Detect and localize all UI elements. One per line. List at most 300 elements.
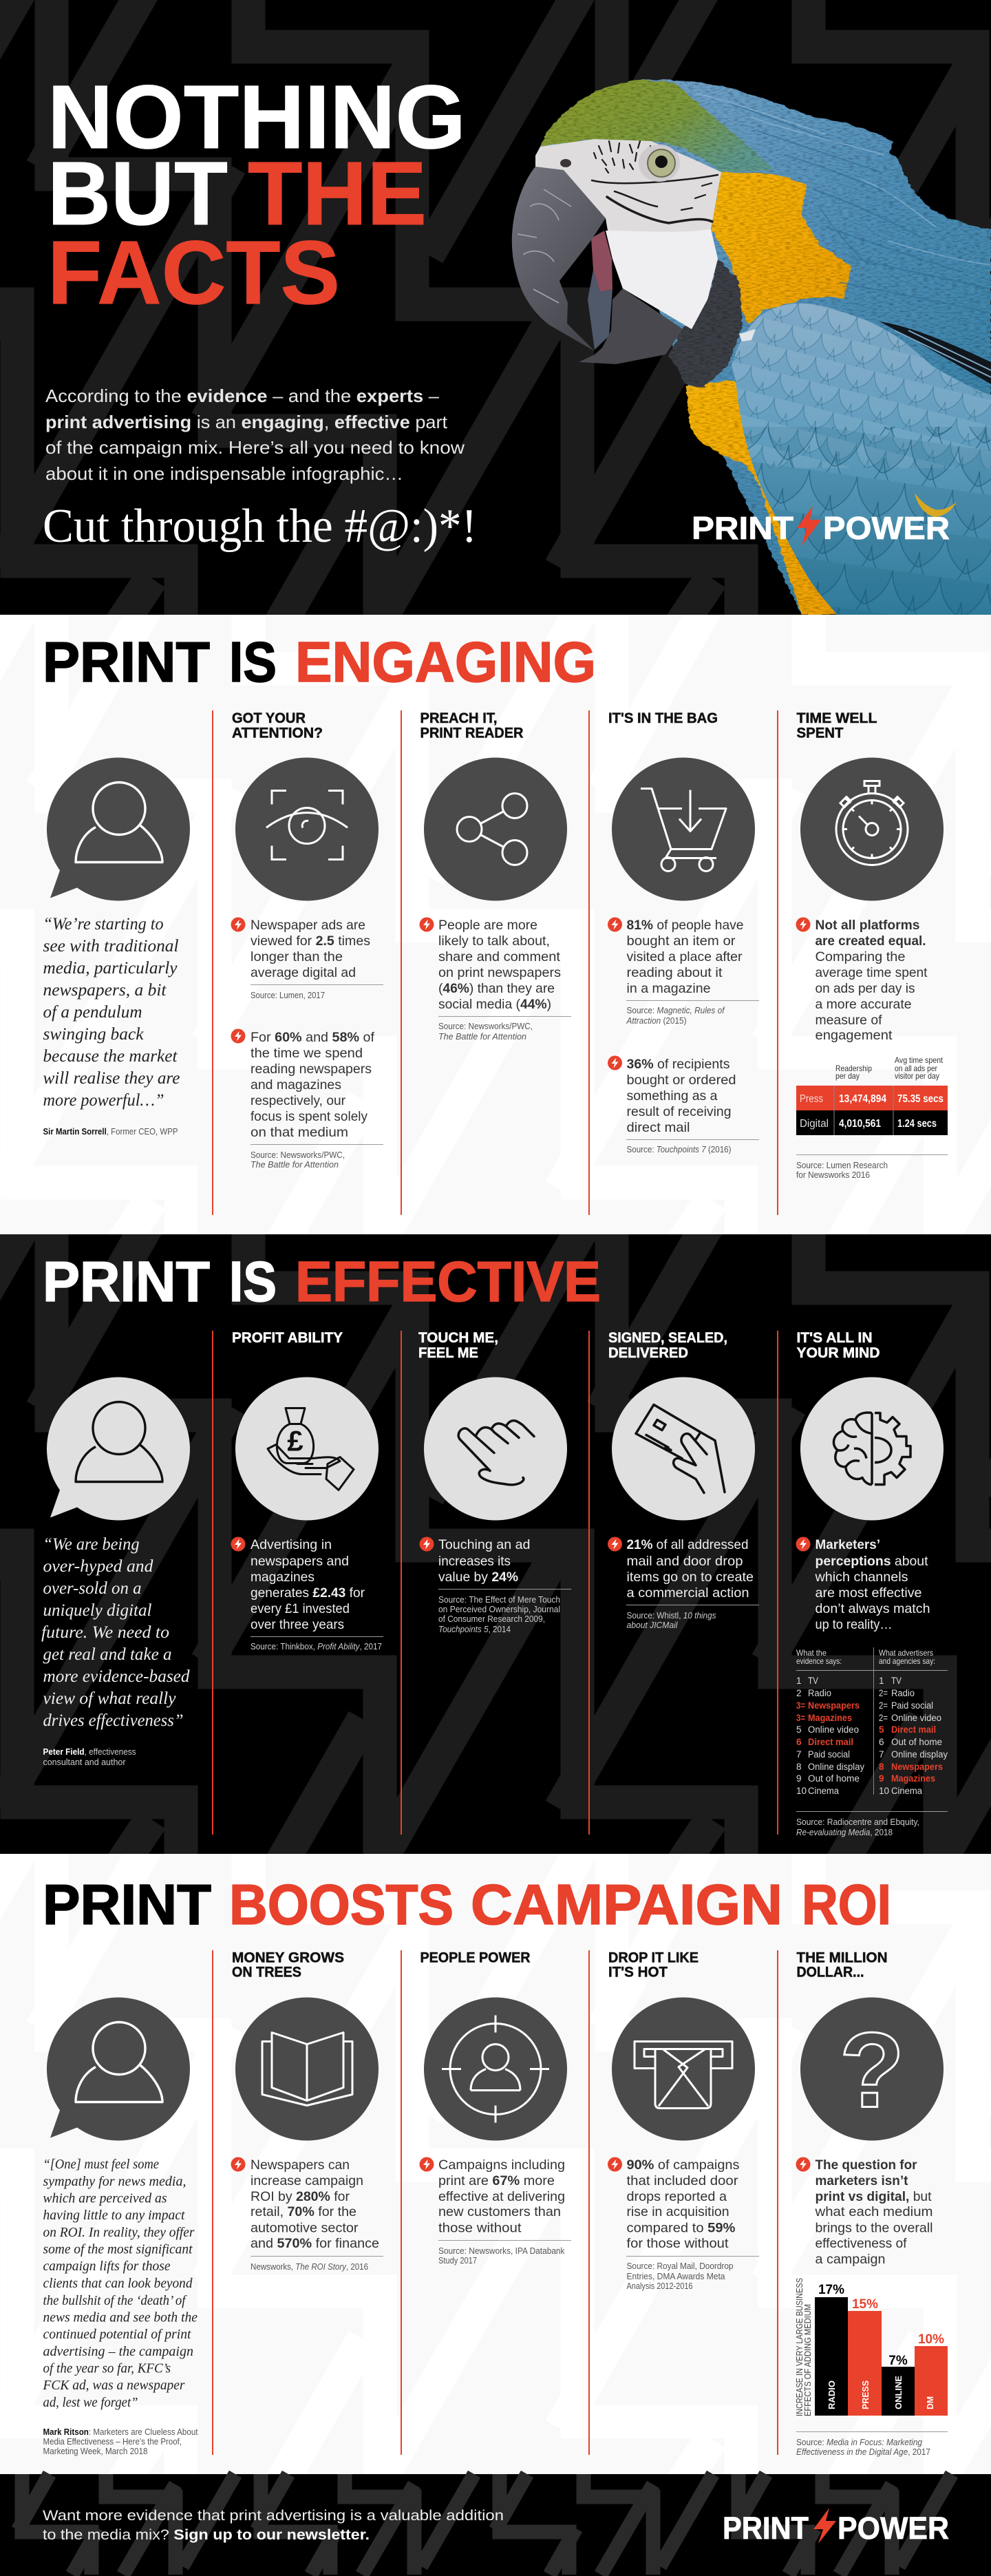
- stat: People are more: [438, 918, 537, 933]
- advertiser ranking list: 5: [879, 1724, 884, 1735]
- evidence ranking list: 10: [796, 1786, 807, 1796]
- table: channel rankings: Source: Radiocentre and Ebquity,: [796, 1817, 919, 1827]
- stat: respectively, our: [251, 1093, 345, 1108]
- y axis label: [794, 2278, 813, 2416]
- stat: 36% of recipients: [626, 1057, 730, 1072]
- intro text: According to the evidence – and the experts –: [45, 386, 440, 406]
- advertiser ranking list: 1: [879, 1676, 884, 1686]
- heading: PRINT: [43, 1872, 211, 1936]
- quote text: view of what really: [43, 1688, 176, 1708]
- stat: on that medium: [251, 1125, 348, 1140]
- icon: question mark: ?: [840, 2010, 904, 2130]
- stat: are created equal.: [815, 933, 926, 949]
- evidence ranking list: 6: [796, 1737, 802, 1747]
- evidence ranking list: TV: [808, 1676, 818, 1686]
- logo: print power: [723, 2508, 949, 2546]
- stat: Comparing the: [815, 949, 906, 964]
- stat: [420, 2157, 571, 2266]
- quote text: more evidence-based: [43, 1666, 190, 1686]
- title: FACTS: [47, 222, 340, 323]
- bar values: 15%: [852, 2297, 878, 2312]
- stat: [420, 1537, 571, 1634]
- column heading: IT'S ALL IN: [797, 1330, 873, 1346]
- advertiser ranking list: 2=: [879, 1713, 888, 1723]
- nostril: [560, 159, 571, 167]
- attribution: Media Effectiveness – Here’s the Proof,: [43, 2437, 182, 2447]
- stat: 81% of people have: [626, 918, 743, 933]
- table: readership and time spent: Digital: [800, 1118, 829, 1130]
- stat: Source: Thinkbox, Profit Ability, 2017: [251, 1642, 382, 1651]
- column heading: GOT YOUR: [232, 710, 306, 726]
- column: drop it like it's hot: [608, 1950, 759, 2291]
- stat: magazines: [251, 1570, 315, 1585]
- attribution: Peter Field, effectiveness: [43, 1747, 136, 1757]
- stat: Source: The Effect of Mere Touch: [438, 1595, 560, 1605]
- column heading: FEEL ME: [418, 1345, 478, 1361]
- title: BUT: [47, 142, 228, 244]
- stat: Analysis 2012-2016: [626, 2281, 693, 2291]
- advertiser ranking list: 2=: [879, 1700, 888, 1711]
- stat: which channels: [814, 1570, 908, 1585]
- heading: ENGAGING: [295, 630, 596, 694]
- attribution: Mark Ritson: Marketers are Clueless About: [43, 2427, 198, 2437]
- stat: and 570% for finance: [251, 2236, 379, 2251]
- column: touch me: [418, 1330, 571, 1634]
- icon: brain and gear: [800, 1377, 944, 1520]
- quote text: continued potential of print: [43, 2327, 192, 2342]
- stat: Newsworks, The ROI Story, 2016: [251, 2262, 368, 2272]
- title: THE: [248, 142, 427, 244]
- evidence ranking list: 2: [796, 1688, 802, 1698]
- heading: [43, 1872, 891, 1936]
- icon: stopwatch: [800, 757, 944, 900]
- stat: For 60% and 58% of: [251, 1030, 375, 1045]
- stat: [796, 2157, 933, 2267]
- column heading: TOUCH ME,: [418, 1330, 498, 1346]
- evidence ranking list: 7: [796, 1749, 802, 1760]
- stat: a more accurate: [815, 997, 911, 1012]
- stat: increases its: [438, 1554, 511, 1569]
- evidence ranking list: 1: [796, 1676, 802, 1686]
- quote text: of a pendulum: [43, 1002, 142, 1022]
- advertiser ranking list: [879, 1676, 948, 1796]
- stat: Touching an ad: [438, 1537, 530, 1552]
- table: channel rankings: [796, 1647, 948, 1837]
- table: channel rankings: and agencies say:: [879, 1656, 935, 1666]
- heading: [43, 1249, 601, 1313]
- evidence ranking list: Cinema: [808, 1786, 839, 1796]
- stat: every £1 invested: [251, 1601, 350, 1616]
- stat: a campaign: [815, 2252, 885, 2267]
- white face patch: [535, 139, 721, 329]
- quote text: because the market: [43, 1046, 178, 1066]
- stat: increase campaign: [251, 2173, 363, 2188]
- stat: longer than the: [251, 949, 343, 964]
- table: channel rankings: What the: [796, 1648, 827, 1658]
- panel: print is engaging: [0, 604, 991, 1255]
- stat: Source: Newsworks/PWC,: [438, 1022, 533, 1031]
- icon: shopping cart: [612, 757, 755, 900]
- stat: The question for: [815, 2157, 917, 2173]
- quote text: “We’re starting to: [43, 914, 164, 933]
- bar values: 17%: [818, 2283, 844, 2297]
- column heading: [418, 1330, 498, 1361]
- stat: ROI by 280% for: [251, 2189, 350, 2204]
- column heading: [232, 1950, 344, 1980]
- stat: that included door: [626, 2173, 738, 2188]
- stat: in a magazine: [626, 981, 710, 996]
- stat: [608, 917, 759, 1026]
- column heading: PREACH IT,: [420, 710, 497, 726]
- quote text: see with traditional: [43, 936, 179, 956]
- evidence ranking list: 8: [796, 1762, 802, 1772]
- stat: Not all platforms: [815, 918, 920, 933]
- column heading: TIME WELL: [797, 710, 877, 726]
- stat: 90% of campaigns: [626, 2157, 740, 2173]
- stat: drops reported a: [626, 2189, 727, 2204]
- quote text: [43, 2157, 198, 2410]
- column heading: IT'S HOT: [608, 1965, 668, 1980]
- stat: [231, 2157, 383, 2272]
- stat: perceptions about: [815, 1554, 928, 1569]
- stat: average time spent: [815, 965, 928, 980]
- column heading: SIGNED, SEALED,: [608, 1330, 727, 1346]
- newsletter call to action: [43, 2508, 504, 2543]
- icon: speech bubble person: [47, 1377, 190, 1521]
- bar chart: [794, 2278, 948, 2457]
- stat: effective at delivering: [438, 2189, 565, 2204]
- icon: card in hand: [612, 1377, 755, 1520]
- stat: Source: Royal Mail, Doordrop: [626, 2261, 734, 2271]
- title: [47, 66, 466, 323]
- stat: items go on to create: [626, 1570, 754, 1585]
- stat: the time we spend: [251, 1046, 363, 1061]
- logo: print power: POWER: [823, 510, 950, 546]
- advertiser ranking list: Out of home: [891, 1737, 942, 1747]
- attribution: Marketing Week, March 2018: [43, 2447, 148, 2456]
- evidence ranking list: Out of home: [808, 1773, 860, 1784]
- bar values: 7%: [888, 2354, 908, 2368]
- heading: EFFECTIVE: [295, 1249, 601, 1313]
- stat: likely to talk about,: [438, 933, 550, 949]
- column: time well spent: [796, 710, 948, 1180]
- column heading: [420, 710, 523, 741]
- quote text: ad, lest we forget”: [43, 2395, 138, 2410]
- newsletter call to action: Want more evidence that print advertising is a valuable addition: [43, 2508, 504, 2524]
- stat: generates £2.43 for: [251, 1585, 365, 1601]
- icon: money bag in hand: [235, 1377, 379, 1520]
- advertiser ranking list: Newspapers: [891, 1762, 943, 1772]
- attribution: [43, 1747, 136, 1767]
- column heading: [608, 1330, 727, 1361]
- column: in the bag: [608, 710, 759, 1154]
- stat: on Perceived Ownership, Journal: [438, 1605, 560, 1614]
- bar values: [818, 2283, 944, 2368]
- stat: a commercial action: [626, 1585, 749, 1601]
- column heading: DELIVERED: [608, 1345, 688, 1361]
- column heading: MONEY GROWS: [232, 1950, 344, 1966]
- parrot illustration: [512, 79, 991, 620]
- heading: IS: [229, 1249, 277, 1313]
- quote text: drives effectiveness”: [43, 1710, 183, 1730]
- stat: for those without: [626, 2236, 729, 2251]
- quote column: [43, 1998, 198, 2456]
- heading: [43, 630, 596, 694]
- stat: Source: Magnetic, Rules of: [626, 1006, 725, 1015]
- column heading: [232, 710, 323, 741]
- intro text: of the campaign mix. Here’s all you need to know: [45, 437, 465, 458]
- evidence ranking list: Direct mail: [808, 1737, 853, 1747]
- table: readership and time spent: Readership: [835, 1064, 872, 1073]
- icon: share: [424, 757, 567, 900]
- face stripes: [592, 141, 718, 223]
- stat: reading newspapers: [251, 1062, 372, 1077]
- stat: Newspaper ads are: [251, 918, 365, 933]
- stat: Newspapers can: [251, 2157, 350, 2173]
- advertiser ranking list: 9: [879, 1773, 884, 1784]
- stat: Advertising in: [251, 1537, 332, 1552]
- stat: something as a: [626, 1088, 718, 1104]
- heading: ROI: [802, 1872, 891, 1936]
- icon: speech bubble person: [47, 758, 190, 901]
- lower beak and mouth: [588, 270, 612, 350]
- quote text: advertising – the campaign: [43, 2344, 193, 2359]
- stat: Source: Whistl, 10 things: [626, 1611, 716, 1620]
- stat: Campaigns including: [438, 2157, 565, 2173]
- stat: of Consumer Research 2009,: [438, 1614, 545, 1624]
- stat: newspapers and: [251, 1554, 349, 1569]
- stat: about JICMail: [626, 1620, 679, 1630]
- column heading: ON TREES: [232, 1965, 301, 1980]
- stat: [608, 1537, 759, 1630]
- stat: marketers isn’t: [815, 2173, 908, 2188]
- y axis label: EFFECTS OF ADDING MEDIUM: [802, 2304, 813, 2416]
- attribution: [43, 2427, 198, 2456]
- stat: Source: Touchpoints 7 (2016): [626, 1145, 731, 1154]
- icon: question mark: [800, 1998, 944, 2141]
- quote text: the bullshit of the ‘death’ of: [43, 2293, 188, 2308]
- stat: [231, 1028, 383, 1170]
- stat: share and comment: [438, 949, 561, 964]
- table: readership and time spent: 13,474,894: [839, 1093, 886, 1105]
- advertiser ranking list: Online video: [891, 1713, 941, 1723]
- newsletter call to action: to the media mix? Sign up to our newsletter.: [43, 2527, 370, 2543]
- title: NOTHING: [47, 66, 466, 167]
- table: readership and time spent: Source: Lumen Research: [796, 1161, 888, 1170]
- quote column: [41, 1377, 190, 1767]
- table: readership and time spent: for Newsworks 2016: [796, 1170, 870, 1180]
- icon: open book: [235, 1998, 379, 2141]
- evidence ranking list: 3=: [796, 1713, 805, 1723]
- evidence ranking list: Newspapers: [808, 1700, 860, 1711]
- stat: up to reality…: [815, 1617, 892, 1632]
- quote text: [43, 914, 180, 1110]
- logo: print power: PRINT: [723, 2511, 809, 2546]
- panel: print boosts campaign roi: [0, 1844, 991, 2494]
- advertiser ranking list: Online display: [891, 1749, 948, 1760]
- stat: [796, 917, 928, 1043]
- column heading: [797, 710, 877, 741]
- intro text: [45, 386, 465, 484]
- column heading: [797, 1330, 880, 1361]
- stat: print vs digital, but: [815, 2189, 932, 2204]
- bar values: 10%: [918, 2332, 944, 2347]
- stat: average digital ad: [251, 965, 356, 980]
- table: channel rankings: evidence says:: [796, 1656, 842, 1666]
- stat: The Battle for Attention: [251, 1160, 339, 1170]
- column heading: SPENT: [797, 726, 844, 741]
- icon: pointing hand: [424, 1377, 567, 1520]
- heading: PRINT: [43, 1249, 210, 1313]
- advertiser ranking list: Radio: [891, 1688, 915, 1698]
- column heading: DOLLAR...: [797, 1965, 864, 1980]
- table: channel rankings: Re-evaluating Media, 2018: [796, 1828, 893, 1837]
- icon: money bag in hand: £: [287, 1425, 303, 1457]
- column: people power: [420, 1950, 571, 2266]
- quote text: over-hyped and: [43, 1556, 153, 1576]
- panel: hero: [0, 0, 991, 633]
- advertiser ranking list: Direct mail: [891, 1724, 936, 1735]
- panel: footer: [0, 2474, 991, 2576]
- advertiser ranking list: TV: [891, 1676, 902, 1686]
- evidence ranking list: Online video: [808, 1724, 859, 1735]
- bars: [815, 2297, 948, 2416]
- stat: Marketers’: [815, 1537, 880, 1552]
- icon: speech bubble person: [47, 1998, 190, 2141]
- quote text: which are perceived as: [43, 2190, 167, 2206]
- quote text: FCK ad, was a newspaper: [43, 2378, 185, 2393]
- stat: Source: Lumen, 2017: [251, 991, 325, 1000]
- stat: [796, 1537, 930, 1632]
- quote column: [43, 758, 190, 1137]
- logo: print power: PRINT: [692, 510, 793, 546]
- quote text: over-sold on a: [43, 1578, 142, 1598]
- column: money grows on trees: [231, 1950, 383, 2272]
- table: readership and time spent: per day: [835, 1071, 860, 1081]
- stat: engagement: [815, 1028, 893, 1043]
- stat: those without: [438, 2221, 522, 2236]
- advertiser ranking list: Magazines: [891, 1773, 935, 1784]
- table: readership and time spent: Avg time spent: [895, 1055, 944, 1065]
- bar chart: Source: Media in Focus: Marketing: [796, 2438, 922, 2447]
- stat: brings to the overall: [815, 2221, 933, 2236]
- quote text: of the year so far, KFC’s: [43, 2361, 171, 2376]
- column: signed sealed delivered: [608, 1330, 759, 1630]
- column heading: THE MILLION: [797, 1950, 888, 1966]
- quote text: “We are being: [43, 1534, 139, 1554]
- stat: what each medium: [814, 2204, 933, 2219]
- table: readership and time spent: Press: [800, 1093, 823, 1105]
- yellow crescent: [915, 493, 957, 517]
- evidence ranking list: Magazines: [808, 1713, 852, 1723]
- evidence ranking list: 5: [796, 1724, 802, 1735]
- column heading: YOUR MIND: [797, 1345, 880, 1361]
- stat: Touchpoints 5, 2014: [438, 1625, 511, 1634]
- stat: [231, 917, 383, 1000]
- bar labels: ONLINE: [893, 2376, 904, 2409]
- table: readership and time spent: on all ads per: [895, 1064, 937, 1073]
- bar labels: DM: [925, 2396, 935, 2409]
- stat: Entries, DMA Awards Meta: [626, 2272, 725, 2281]
- stat: print are 67% more: [438, 2173, 555, 2188]
- column heading: [608, 1950, 699, 1980]
- tagline: Cut through the #@:)*!: [43, 500, 477, 553]
- column: got your attention: [231, 710, 383, 1170]
- stat: are most effective: [815, 1585, 922, 1601]
- icon: envelope in slot: [612, 1998, 755, 2141]
- table: channel rankings: What advertisers: [879, 1648, 933, 1658]
- attribution: consultant and author: [43, 1757, 125, 1767]
- quote text: [41, 1534, 190, 1730]
- evidence ranking list: [796, 1676, 864, 1796]
- advertiser ranking list: 7: [879, 1749, 884, 1760]
- stat: over three years: [251, 1617, 344, 1632]
- quote text: get real and take a: [43, 1644, 172, 1664]
- quote text: media, particularly: [43, 958, 178, 978]
- icon: eye: [235, 757, 379, 900]
- evidence ranking list: 9: [796, 1773, 802, 1784]
- stat: The Battle for Attention: [438, 1032, 526, 1042]
- column: profit ability: [231, 1330, 383, 1651]
- icon: target person: [424, 1998, 567, 2141]
- stat: on ads per day is: [815, 981, 915, 996]
- advertiser ranking list: Cinema: [891, 1786, 922, 1796]
- intro text: print advertising is an engaging, effective part: [45, 412, 448, 432]
- column: preach it: [420, 710, 571, 1042]
- bar labels: RADIO: [827, 2380, 837, 2409]
- table: readership and time spent: 75.35 secs: [897, 1093, 944, 1105]
- quote text: more powerful…”: [43, 1090, 164, 1110]
- quote text: newspapers, a bit: [43, 980, 167, 1000]
- bar labels: [827, 2376, 935, 2409]
- column heading: PROFIT ABILITY: [232, 1330, 343, 1346]
- quote text: will realise they are: [43, 1068, 180, 1088]
- stat: effectiveness of: [815, 2236, 907, 2251]
- stat: [608, 2157, 759, 2291]
- evidence ranking list: 3=: [796, 1700, 805, 1711]
- advertiser ranking list: 8: [879, 1762, 884, 1772]
- stat: and magazines: [251, 1077, 341, 1092]
- stat: Source: Newsworks, IPA Databank: [438, 2246, 565, 2256]
- stat: visited a place after: [626, 949, 743, 964]
- stat: 21% of all addressed: [626, 1537, 749, 1552]
- advertiser ranking list: Paid social: [891, 1700, 933, 1711]
- column heading: PEOPLE POWER: [420, 1950, 530, 1966]
- evidence ranking list: Paid social: [808, 1749, 850, 1760]
- column heading: [797, 1950, 888, 1980]
- stat: compared to 59%: [626, 2221, 735, 2236]
- stat: on print newspapers: [438, 965, 561, 980]
- column heading: PRINT READER: [420, 726, 523, 741]
- quote text: “[One] must feel some: [43, 2157, 159, 2172]
- table: readership and time spent: 1.24 secs: [897, 1118, 937, 1130]
- stat: bought or ordered: [626, 1073, 736, 1088]
- heading: BOOSTS: [229, 1872, 454, 1936]
- bar chart: Effectiveness in the Digital Age, 2017: [796, 2447, 930, 2457]
- quote text: having little to any impact: [43, 2208, 186, 2223]
- intro text: about it in one indispensable infographic…: [45, 463, 403, 484]
- stat: result of receiving: [626, 1104, 731, 1119]
- heading: PRINT: [43, 630, 210, 694]
- quote text: future. We need to: [41, 1622, 169, 1642]
- stat: rise in acquisition: [626, 2204, 729, 2219]
- stat: automotive sector: [251, 2221, 359, 2236]
- column: the million dollar: [794, 1950, 948, 2457]
- heading: CAMPAIGN: [471, 1872, 782, 1936]
- white wing tuft: [739, 329, 756, 341]
- stat: direct mail: [626, 1120, 690, 1135]
- column heading: ATTENTION?: [232, 726, 323, 741]
